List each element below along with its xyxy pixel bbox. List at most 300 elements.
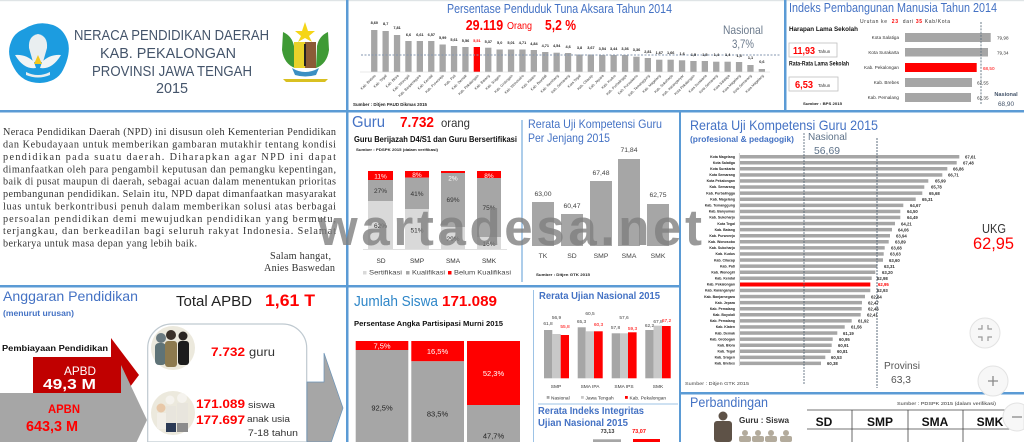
panel: foreword text: luas untuk berkontribusi penuh dalam memberikan solusi atas berbagai — [3, 201, 336, 212]
panel: foreword text: Anies Baswedan — [264, 263, 335, 274]
heading: report title — [74, 28, 269, 97]
grouped bar chart: national exam: 61,8 — [543, 321, 553, 327]
horizontal bar chart: regencies: Kab. Wonogiri — [711, 270, 735, 274]
total APBD: 1,61 T — [265, 291, 316, 310]
horizontal bar chart: regencies: 67,61 — [965, 154, 976, 160]
horizontal bar chart: regencies: 60,38 — [827, 361, 838, 366]
horizontal bar chart: regencies: 62,47 — [868, 300, 879, 306]
bar chart: illiteracy by regency: 1,67 — [656, 51, 663, 55]
panel: foreword text: Neraca Pendidikan Daerah (NPD) ini disusun oleh Kementerian Pendidikan — [3, 127, 336, 138]
bar chart: illiteracy by regency: 5,51 — [473, 39, 481, 43]
horizontal bar chart: regencies: Kota Semarang — [709, 173, 735, 177]
horizontal bar chart: regencies: 67,48 — [963, 160, 974, 166]
bar chart: illiteracy by regency: Kab. Karanganyar — [661, 73, 685, 97]
panel: human development index — [789, 0, 1018, 108]
heading: comparison: Perbandingan — [690, 395, 768, 410]
table: ratio — [807, 410, 1018, 442]
bar chart: illiteracy by regency: Kab. Banjarnegara — [398, 74, 422, 98]
heading: teacher count: Guru — [352, 114, 385, 131]
bar chart: illiteracy by regency: 1,5 — [691, 53, 696, 57]
legend: qualification: Kualifikasi — [412, 270, 445, 276]
national IPM: Nasional — [994, 92, 1018, 98]
bar chart: integrity index: 73,13 — [601, 429, 614, 435]
heading: integrity index: Rerata Indeks Integritas — [538, 405, 644, 417]
source note: Sumber : BPS 2015 — [803, 101, 843, 106]
bar chart: illiteracy by regency: 2,81 — [644, 50, 652, 54]
bar chart: competency by level: SMA — [622, 253, 637, 260]
source note: Sumber : Ditjen GTK 2015 — [685, 381, 749, 387]
bar chart: IPM comparison — [864, 22, 1009, 105]
bar chart: competency by level: SMK — [651, 253, 666, 260]
bar chart: illiteracy by regency: 4,54 — [553, 44, 561, 48]
heading: budget: (menurut urusan) — [3, 309, 74, 318]
bar chart: IPM comparison: Kota Salatiga — [872, 35, 899, 40]
panel: foreword text: dimanfaatkan oleh para pengambil keputusan dan pemangku kepentingan, — [3, 164, 336, 175]
horizontal bar chart: regencies: Kab. Batang — [715, 228, 735, 232]
watermark: wartadesa.net — [317, 199, 702, 256]
horizontal bar chart: regencies: 60,91 — [838, 343, 849, 348]
stacked bar chart: qualification: 51% — [410, 228, 424, 234]
horizontal bar chart: regencies: Kab. Sragen — [715, 356, 735, 360]
bar chart: competency by level: TK — [539, 253, 548, 260]
grouped bar chart: national exam — [543, 311, 671, 390]
student counts: 171.089 — [196, 397, 245, 411]
stacked bar chart: qualification: 2% — [448, 176, 458, 182]
source note: Sumber : Ditjen PAUD Dikmas 2015 — [353, 102, 428, 107]
bar chart: illiteracy by regency: Kab. Sukoharjo — [653, 74, 674, 94]
bar chart: illiteracy by regency: Kab. Tegal — [373, 74, 388, 89]
bar chart: illiteracy by regency: 1,3 — [736, 54, 742, 58]
bar chart: illiteracy by regency: Kab. Blora — [385, 74, 400, 89]
stacked bar chart: enrollment: 92,5% — [371, 404, 393, 412]
heading: report title: 2015 — [156, 81, 188, 97]
stacked bar chart: enrollment — [356, 341, 520, 442]
bar chart: illiteracy by regency: Kab. Wonosobo — [504, 74, 525, 95]
grouped bar chart: national exam: 65,3 — [577, 319, 586, 325]
bar chart: illiteracy by regency: 3,36 — [633, 48, 640, 52]
bar chart: illiteracy by regency: 3,54 — [599, 47, 607, 51]
icon: students — [151, 391, 195, 435]
heading: student count: 171.089 — [442, 293, 497, 310]
bar chart: IPM comparison: Kab. Brebes — [874, 80, 900, 85]
horizontal bar chart: regencies: Kab. Sukoharjo — [709, 216, 735, 220]
bar chart: competency by level: 63,00 — [534, 191, 552, 198]
national value: 3,7% — [732, 37, 754, 51]
horizontal bar chart: regencies: 63,89 — [895, 240, 906, 244]
horizontal bar chart: regencies: 62,41 — [867, 312, 878, 318]
stacked bar chart: qualification: 41% — [410, 191, 424, 198]
panel: competency by regency — [685, 117, 1014, 388]
bar chart: illiteracy by regency: 6,57 — [428, 33, 435, 37]
subheading: teacher qualification: Guru Berijazah D4/S1 dan Guru Bersertifikasi — [354, 135, 517, 144]
student counts — [196, 397, 298, 438]
bar chart: IPM comparison: Kab. Pemalang — [868, 95, 899, 100]
horizontal bar chart: regencies: 62,95 — [878, 282, 889, 287]
total APBD — [176, 291, 316, 310]
horizontal bar chart: regencies: 65,99 — [935, 178, 946, 184]
bar chart: illiteracy by regency: 7,81 — [393, 26, 401, 30]
horizontal bar chart: regencies: Kab. Brebes — [715, 362, 735, 366]
panel: illiteracy chart — [353, 1, 780, 107]
total APBD: Total APBD — [176, 293, 252, 310]
stacked bar chart: qualification: 11% — [374, 174, 387, 180]
bar chart: illiteracy by regency: 4,84 — [530, 42, 538, 46]
horizontal bar chart: regencies: 64,06 — [898, 228, 909, 232]
horizontal bar chart: regencies: Kab. Kudus — [716, 252, 735, 256]
horizontal bar chart: regencies: Kab. Jepara — [715, 301, 735, 305]
bar chart: illiteracy by regency: Kota Semarang — [698, 74, 719, 94]
bar chart: illiteracy by regency: Kab. Semarang — [550, 74, 571, 94]
callout: UKG score: UKG — [982, 222, 1006, 236]
panel: foreword text — [3, 127, 336, 274]
panel: foreword text: Salam hangat, — [270, 251, 331, 262]
heading: competency by level: Per Jenjang 2015 — [528, 131, 610, 145]
bar chart: integrity index: 73,07 — [632, 429, 646, 435]
callout: UKG score: 62,95 — [973, 235, 1014, 253]
horizontal bar chart: regencies: Kab. Pemalang — [710, 319, 735, 323]
bar chart: illiteracy by regency: Kab. Magelang — [642, 74, 662, 94]
horizontal bar chart: regencies: Kab. Karanganyar — [705, 289, 736, 293]
horizontal bar chart: regencies: Kab. Banjarnegara — [704, 295, 735, 299]
stacked bar chart: qualification: 8% — [412, 172, 422, 179]
national value — [723, 23, 763, 51]
bar chart: illiteracy by regency: Kab. Wonogiri — [392, 74, 411, 93]
bar chart: illiteracy by regency: Kab. Purwokerto — [617, 74, 639, 96]
bar chart: IPM comparison: 68,50 — [983, 66, 995, 71]
heading: competency by level: Rerata Uji Kompetensi Guru — [528, 117, 662, 131]
grouped bar chart: national exam: 57,6 — [619, 315, 629, 321]
arrow: outcome — [307, 353, 343, 442]
callout: expected years of schooling — [789, 26, 858, 57]
bar chart: illiteracy by regency: 8,7 — [383, 22, 388, 26]
heading: budget: Anggaran Pendidikan — [3, 288, 138, 304]
horizontal bar chart: regencies: Kab. Boyolali — [713, 313, 735, 317]
bar chart: illiteracy by regency: Kab. Purworejo — [424, 74, 445, 94]
icon: ministry logo — [9, 23, 69, 83]
horizontal bar chart: regencies: Kab. Pemalang — [710, 307, 735, 311]
grouped bar chart: national exam: 59,3 — [628, 326, 637, 332]
callout: expected years of schooling: Harapan Lama Sekolah — [789, 26, 858, 33]
bar chart: competency by level: 71,84 — [620, 147, 638, 154]
heading: report title: NERACA PENDIDIKAN DAERAH — [74, 28, 269, 44]
student counts: 7-18 tahun — [248, 428, 298, 438]
student counts: siswa — [248, 400, 276, 411]
bar chart: illiteracy by regency: Kab. Cilacap — [576, 74, 594, 91]
callout: expected years of schooling: 11,93 — [793, 45, 815, 57]
teacher count: guru — [249, 347, 275, 359]
bar chart: illiteracy by regency: 6,6 — [406, 33, 411, 37]
horizontal bar chart: regencies: 65,68 — [929, 191, 940, 196]
horizontal bar chart: regencies: Kab. Klaten — [716, 325, 735, 329]
horizontal bar chart: regencies: 63,68 — [891, 246, 902, 250]
panel: teachers — [352, 114, 517, 276]
card: teachers and students — [148, 324, 307, 442]
heading: competency by regency — [690, 117, 878, 144]
bar chart: IPM comparison: Kab. Pekalongan — [864, 65, 899, 70]
panel: foreword text: pendidikan pada suatu daerah. Diharapkan agar NPD ini dapat — [3, 152, 336, 163]
bar chart: illiteracy by regency: Kab. Rembang — [540, 74, 560, 94]
horizontal bar chart: regencies: 60,81 — [837, 349, 848, 354]
horizontal bar chart: regencies: Kab. Purbalingga — [706, 192, 735, 196]
legend: national exam: Kab. Pekalongan — [630, 396, 666, 402]
national IPM — [994, 92, 1018, 108]
bar chart: IPM comparison: 62,55 — [977, 80, 989, 86]
heading: teacher count — [352, 114, 470, 131]
horizontal bar chart: regencies: 65,78 — [931, 184, 942, 190]
grouped bar chart: national exam: SMP — [551, 384, 561, 390]
horizontal bar chart: regencies: 63,60 — [889, 258, 900, 263]
bar chart: illiteracy by regency: Kab. Kudus — [601, 74, 617, 90]
bar chart: competency by level: SD — [567, 253, 577, 260]
provincial value — [884, 360, 920, 386]
bar chart: illiteracy by regency: Kab. Grobogan — [494, 74, 514, 94]
heading: teacher count: orang — [441, 116, 470, 130]
stacked bar chart: qualification: 69% — [446, 197, 460, 204]
bar chart: illiteracy by regency: 4,71 — [519, 41, 526, 45]
bar chart: illiteracy by regency: Kab. Pati — [444, 74, 457, 87]
legend: qualification: Sertifikasi — [369, 270, 402, 276]
heading: teacher count: 7.732 — [400, 114, 434, 131]
legend: qualification: Belum Kualifikasi — [454, 270, 511, 276]
source note: Sumber : Ditjen GTK 2015 — [536, 273, 590, 277]
horizontal bar chart: regencies: 62,46 — [868, 306, 879, 312]
horizontal bar chart: regencies: 64,67 — [910, 203, 921, 208]
horizontal bar chart: regencies: Kab. Blora — [717, 344, 735, 348]
bar chart: competency by level: SMP — [594, 253, 609, 260]
horizontal bar chart: regencies: 64,21 — [901, 222, 912, 226]
horizontal bar chart: regencies: Kab. Pekalongan — [707, 283, 735, 287]
callout: mean years of schooling: Tahun — [818, 83, 831, 88]
bar chart: illiteracy by regency: Kab. Sragen — [485, 74, 502, 91]
stacked bar chart: qualification: SD — [376, 258, 386, 265]
national value: 56,69 — [814, 145, 840, 157]
bar chart: illiteracy by regency: 3,67 — [587, 46, 595, 50]
stacked bar chart: enrollment: 83,5% — [427, 410, 448, 418]
icon: regency emblem — [282, 22, 329, 82]
horizontal bar chart: regencies: Kab. Wonosobo — [708, 240, 735, 244]
arrow: APBD: Pembiayaan Pendidikan — [2, 344, 108, 353]
bar chart: illiteracy by regency: Kab. Klaten — [521, 74, 537, 90]
horizontal bar chart: regencies: Kota Pekalongan — [707, 179, 735, 183]
horizontal bar chart: regencies: Kab. Grobogan — [710, 338, 735, 342]
bar chart: illiteracy by regency: Kab. Pekalongan — [458, 74, 480, 96]
horizontal bar chart: regencies: 61,92 — [858, 318, 869, 324]
horizontal bar chart: regencies: Kota Tegal — [717, 222, 735, 226]
stacked bar chart: qualification: SMK — [482, 258, 497, 265]
grouped bar chart: national exam: SMA IPA — [581, 384, 600, 390]
bar chart: IPM comparison: Kota Surakarta — [868, 50, 899, 55]
horizontal bar chart: regencies: 61,56 — [851, 324, 862, 330]
panel: foreword text: dan Kebudayaan untuk memberikan gambaran mutakhir tentang kondisi — [3, 140, 336, 150]
heading: competency by level — [528, 117, 662, 145]
grouped bar chart: national exam: 67,2 — [662, 318, 671, 324]
heading: report title: KAB. PEKALONGAN — [100, 46, 236, 62]
bar chart: competency by level: 60,47 — [563, 203, 581, 210]
horizontal bar chart: regencies: 63,20 — [882, 270, 893, 275]
bar chart: illiteracy by regency: 5,56 — [462, 39, 469, 43]
horizontal bar chart: regencies: 66,71 — [948, 172, 959, 178]
viewer controls — [970, 318, 1024, 431]
button: fit — [970, 318, 1000, 348]
grouped bar chart: national exam: 67,8 — [653, 319, 663, 325]
heading: illiteracy title: Persentase Penduduk Tuna Aksara Tahun 2014 — [447, 1, 672, 16]
horizontal bar chart: regencies: 60,95 — [839, 337, 850, 342]
panel: foreword text: persoalan pendidikan demi mewujudkan pendidikan yang bermutu, — [3, 214, 336, 225]
horizontal bar chart: regencies: Kab. Kendal — [715, 276, 735, 280]
panel: foreword text: terjangkau, dan berkeadilan bagi seluruh rakyat Indonesia. Selamat — [3, 226, 336, 237]
bar chart: illiteracy by regency: 1,4 — [714, 53, 720, 57]
table: ratio: SMA — [922, 415, 949, 429]
bar chart: competency by level: 67,48 — [592, 170, 610, 177]
bar chart: IPM comparison: 79,98 — [997, 36, 1009, 40]
bar chart: illiteracy by regency: 1,66 — [667, 51, 674, 55]
source note: Sumber : PDSPK 2015 (dalam verifikasi) — [897, 401, 996, 407]
button: zoom in — [978, 366, 1008, 396]
heading: budget — [3, 288, 138, 318]
bar chart: illiteracy by regency: Kab. Brebes — [360, 74, 377, 91]
bar chart: illiteracy by regency: 0,6 — [759, 60, 765, 64]
horizontal bar chart: regencies: 64,50 — [907, 209, 918, 214]
stacked bar chart: enrollment: 7,5% — [373, 342, 391, 350]
grouped bar chart: national exam: 60,3 — [594, 322, 603, 328]
stacked bar chart: qualification: 27% — [374, 188, 387, 195]
panel: comparison — [690, 395, 1018, 442]
bar chart: illiteracy by regency: 3,36 — [621, 47, 629, 51]
illiteracy figures — [466, 18, 576, 34]
grouped bar chart: national exam: SMK — [653, 384, 664, 390]
stacked bar chart: qualification — [363, 171, 507, 265]
horizontal bar chart: regencies: 62,64 — [871, 294, 882, 300]
grouped bar chart: national exam: SMA IPS — [614, 384, 634, 390]
heading: integrity index — [538, 405, 644, 429]
icon: teachers — [151, 326, 195, 370]
bar chart: illiteracy by regency: Kab. Batang — [474, 74, 491, 91]
teacher count: 7.732 — [211, 345, 245, 359]
horizontal bar chart: regencies: 62,93 — [877, 288, 888, 293]
horizontal bar chart: regencies: Kab. Tegal — [718, 350, 735, 354]
bar chart: illiteracy by regency: Kota Magelang — [722, 74, 742, 94]
panel: header — [9, 22, 329, 97]
horizontal bar chart: regencies: Kab. Pati — [720, 264, 735, 268]
bar chart: illiteracy by regency: 5,99 — [439, 36, 446, 40]
panel: students — [354, 290, 671, 442]
illiteracy figures: 5,2 % — [545, 18, 576, 34]
illiteracy figures: 29.119 — [466, 18, 503, 34]
heading: student count: Jumlah Siswa — [354, 293, 439, 310]
bar chart: illiteracy by regency: Kab. Temanggung — [627, 74, 651, 97]
horizontal bar chart: regencies: Kab. Cilacap — [714, 258, 735, 262]
arrow: APBN — [0, 365, 147, 442]
bar chart: illiteracy by regency: Kab. Purbalingga — [605, 74, 628, 96]
horizontal bar chart: regencies: 63,63 — [890, 252, 901, 256]
stacked bar chart: qualification: SMA — [446, 258, 461, 265]
bar chart: competency by level: 62,75 — [649, 192, 667, 199]
bar chart: competency by level — [532, 147, 669, 260]
heading: national exam: Rerata Ujian Nasional 2015 — [539, 290, 660, 302]
callout: mean years of schooling: Rata-Rata Lama Sekolah — [789, 62, 849, 68]
table: ratio: SMP — [867, 415, 893, 429]
bar chart: illiteracy by regency: Kab. Boyolali — [530, 74, 548, 92]
bar chart: illiteracy by regency: Kota Salatiga — [713, 74, 731, 92]
stacked bar chart: enrollment: 16,5% — [427, 347, 448, 356]
horizontal bar chart: regencies: Kab. Demak — [715, 332, 735, 336]
bar chart: illiteracy by regency: 1,4 — [725, 53, 731, 57]
icon: teacher and students — [714, 412, 792, 442]
horizontal bar chart: regencies: Kab. Sukoharjo — [709, 246, 735, 250]
panel: budget — [0, 288, 343, 442]
bar chart: illiteracy by regency: 5,01 — [507, 41, 515, 45]
bar chart: illiteracy by regency: 5,61 — [450, 38, 458, 42]
horizontal bar chart: regencies: 63,94 — [896, 234, 907, 238]
callout: expected years of schooling: Tahun — [818, 49, 831, 54]
provincial value: Provinsi — [884, 360, 920, 372]
stacked bar chart: enrollment: 52,3% — [483, 369, 504, 378]
bar chart: illiteracy by regency: Kota Tegal — [567, 74, 582, 89]
national IPM: 68,90 — [998, 101, 1014, 108]
callout: UKG score — [973, 222, 1014, 253]
bar chart: integrity index — [593, 429, 660, 442]
callout: mean years of schooling: 6,53 — [795, 79, 813, 91]
table: ratio: SD — [816, 415, 833, 429]
horizontal bar chart: regencies: Kota Surakarta — [710, 167, 735, 171]
grouped bar chart: national exam: 55,8 — [560, 324, 570, 330]
heading: competency by regency: (profesional & pedagogik) — [690, 134, 794, 144]
bar chart: illiteracy by regency: 1,5 — [702, 53, 708, 57]
bar chart: illiteracy by regency: 3,44 — [610, 47, 618, 51]
bar chart: illiteracy by regency: 1,6 — [679, 52, 685, 56]
stacked bar chart: qualification: SMP — [410, 258, 424, 265]
stacked bar chart: qualification: 62% — [374, 223, 387, 230]
bar chart: IPM comparison: 79,34 — [997, 50, 1009, 56]
national value — [808, 131, 847, 157]
legend: national exam — [547, 396, 666, 402]
grouped bar chart: national exam: 57,8 — [611, 325, 620, 331]
horizontal bar chart: regencies: 63,31 — [884, 264, 895, 269]
horizontal bar chart: regencies: 61,19 — [843, 331, 854, 336]
icon: teacher and students: Guru : Siswa — [739, 415, 789, 425]
panel: foreword text: berkarya untuk masa depan yang lebih baik. — [3, 239, 197, 250]
horizontal bar chart: regencies: 65,31 — [922, 197, 933, 202]
stacked bar chart: qualification: 8% — [484, 173, 494, 180]
horizontal bar chart: regencies: 66,86 — [953, 166, 964, 172]
stacked bar chart: enrollment: 47,7% — [483, 432, 504, 440]
illiteracy figures: Orang — [507, 21, 532, 32]
horizontal bar chart: regencies: Kota Magelang — [710, 155, 735, 159]
bar chart: illiteracy by regency: 5,37 — [485, 40, 492, 44]
bar chart: illiteracy by regency: Kab. Demak — [451, 74, 468, 91]
table: ratio: SMK — [977, 415, 1004, 429]
heading: integrity index: Ujian Nasional 2015 — [538, 417, 628, 429]
national value: Nasional — [808, 131, 847, 143]
horizontal bar chart: regencies: 64,49 — [907, 215, 918, 220]
horizontal bar chart: regencies: Kota Salatiga — [713, 161, 735, 165]
stacked bar chart: qualification: 75% — [482, 205, 496, 212]
bar chart: illiteracy by regency: Kab. Jepara — [588, 74, 605, 90]
horizontal bar chart: regencies: Kab. Banyumas — [709, 210, 735, 214]
horizontal bar chart: regencies — [704, 133, 976, 388]
arrow: APBD — [0, 338, 139, 412]
bar chart: illiteracy by regency: Kota Semarang — [732, 74, 753, 94]
bar chart: illiteracy by regency: 4,6 — [565, 45, 571, 49]
subheading: enrollment: Persentase Angka Partisipasi Murni 2015 — [354, 319, 503, 328]
bar chart: illiteracy by regency: 3,8 — [577, 46, 582, 50]
provincial value: 63,3 — [891, 374, 911, 386]
bar chart: illiteracy by regency: 4,71 — [542, 44, 549, 48]
national value: Nasional — [723, 23, 763, 37]
heading: competency by regency: Rerata Uji Kompetensi Guru 2015 — [690, 117, 878, 133]
bar chart: IPM comparison: 62,35 — [977, 96, 989, 100]
arrow: APBD: APBD — [64, 364, 96, 378]
